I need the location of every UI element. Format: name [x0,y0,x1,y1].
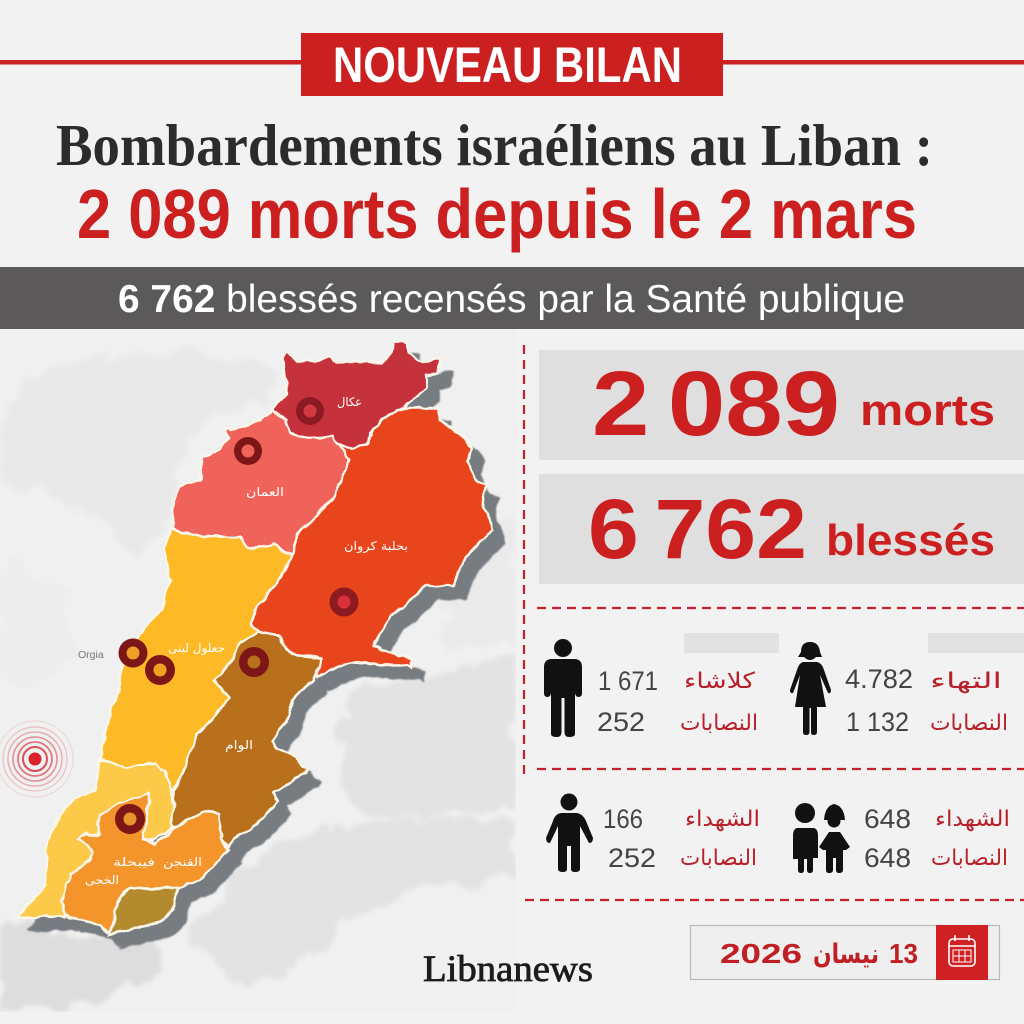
stat: women: النصابات [930,711,1008,736]
region labels: فيبحلة [113,855,155,869]
stat: children: النصابات [931,846,1008,871]
map label: coastal town: Orgia [78,649,104,661]
stat: women: 1 132 [846,707,909,737]
stat: elderly: الشهداء [685,807,760,832]
icon: woman [790,642,831,735]
panel: injured total [539,474,1024,584]
stat: women [790,642,1008,737]
stat: elderly: 252 [608,843,656,873]
stat: children [793,803,1010,873]
region: Brown [173,632,322,847]
background map texture [0,355,516,1012]
region labels: العمان [246,485,284,499]
stat: children: 648 [864,804,911,834]
banner: nouveau bilan: NOUVEAU BILAN [333,37,682,93]
region: Akkar [273,340,441,448]
stat: men [544,639,758,737]
title line 1: Bombardements israéliens au Liban : [56,112,933,178]
panel: deaths total [539,350,1024,460]
pin: Brown [239,647,269,677]
stat: children: 648 [864,843,911,873]
pin: Bekaa [330,588,358,616]
icon: man [544,639,582,737]
map of Lebanon [17,340,493,935]
stat: men: النصابات [680,711,758,736]
icon: calendar [949,935,975,966]
region: Olive [110,888,178,935]
pin: North [234,437,262,465]
date box [690,925,1000,980]
region: Nabatieh [62,792,230,932]
stat: children: الشهداء [935,807,1010,832]
icon: children [793,803,850,873]
panel: deaths total: 2 089 [592,353,840,455]
panel: injured total: 6 762 [588,482,807,576]
pin: coast 2 [145,655,175,685]
region labels: القنجن [163,855,202,870]
stat: elderly: النصابات [680,846,757,871]
panel: deaths total: morts [860,386,995,435]
pin: Akkar [296,397,324,425]
pin: coast 1 [118,638,148,668]
icon: strike target rings [0,721,73,797]
panel: injured total: blessés [826,516,995,565]
region: Mount Lebanon [100,528,293,793]
stat: men: كلاشاء [684,669,756,694]
subtitle band [0,267,1024,329]
region labels [85,395,408,887]
icon: person [546,794,593,872]
stat: women: التهاء [930,669,1002,694]
top red rule [0,60,1024,64]
pin: South [115,804,145,834]
title line 2: 2 089 morts depuis le 2 mars [77,175,917,253]
stat: men: 1 671 [598,666,658,696]
subtitle band: 6 762 blessés recensés par la Santé publique [118,278,905,321]
region: South outer [17,760,173,918]
stat: elderly: 166 [603,804,643,834]
region labels: جعلول لبنى [168,641,225,656]
brand: Libnanews: Libnanews [423,949,593,990]
date box: 2026 [720,938,802,969]
date box: 13 [889,938,918,969]
stat: elderly [546,794,760,873]
stat: men: 252 [597,707,645,737]
stat: women: 4.782 [845,664,913,694]
region labels: الخجى [85,873,119,887]
region labels: بحلبة كروان [344,539,408,554]
date box: نيسان [813,939,879,970]
region: Bekaa [250,408,493,677]
region: North Lebanon [172,411,350,557]
region labels: عكال [337,395,362,409]
region labels: الوام [225,738,253,753]
